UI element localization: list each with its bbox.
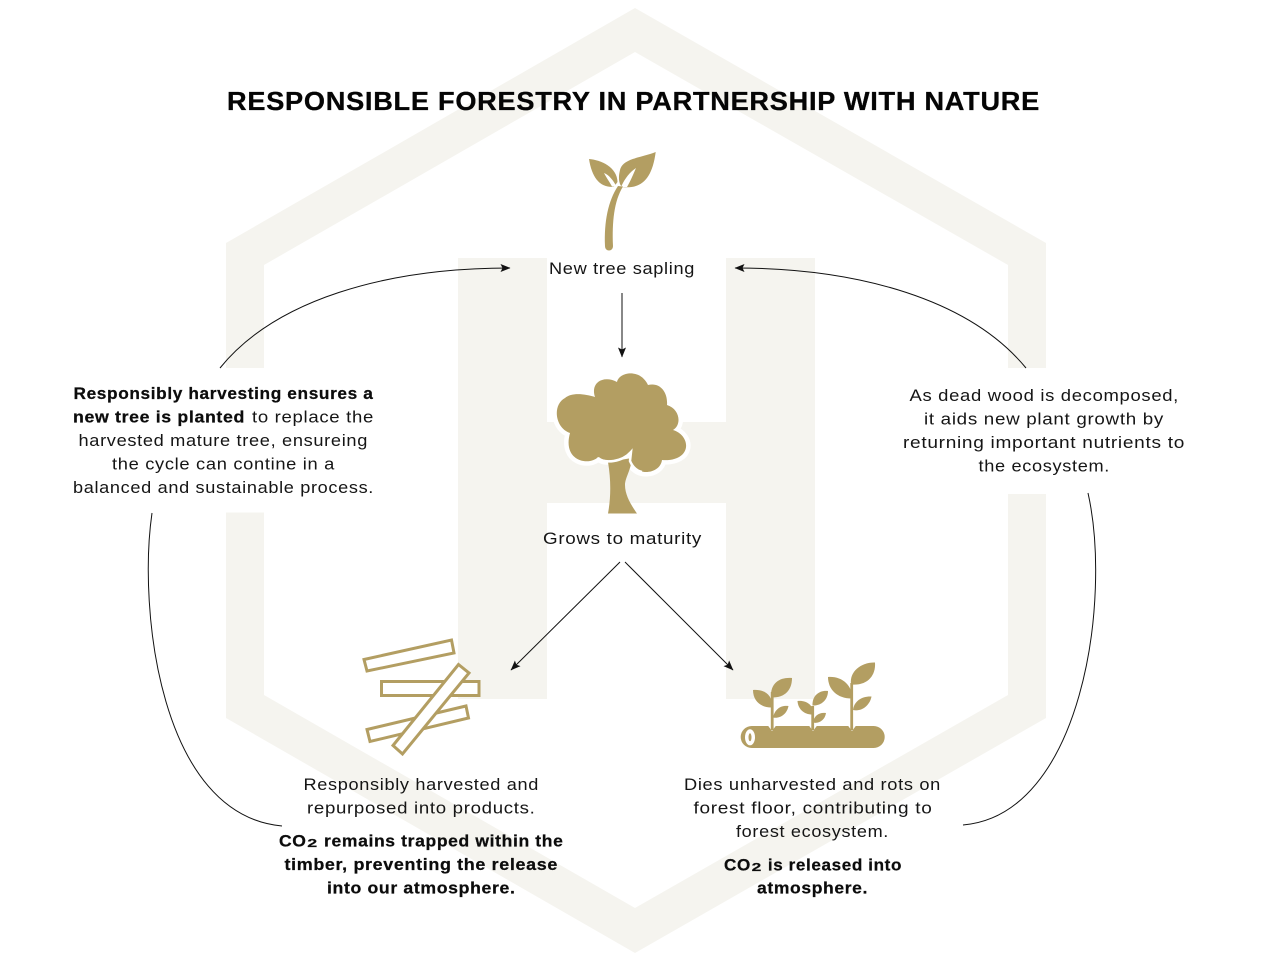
- text: harvested outcome: [279, 776, 564, 898]
- arrow: to unharvested: [625, 562, 733, 670]
- text: harvesting explanation: Responsibly harvesting ensures a: [74, 385, 374, 403]
- connector: harvested outcome to harvesting text: [148, 513, 282, 826]
- arrow: sapling to mature tree: [621, 293, 623, 357]
- text: unharvested outcome: forest ecosystem.: [736, 823, 889, 841]
- text: harvesting explanation: to replace the: [252, 409, 374, 427]
- text: unharvested outcome: Dies unharvested and rots on: [684, 776, 941, 794]
- connector: unharvested outcome to decomposition text: [963, 493, 1096, 825]
- icon: timber planks: [364, 640, 479, 754]
- arrow: harvesting text back to sapling: [220, 268, 510, 368]
- text: unharvested outcome: forest floor, contributing to: [694, 800, 932, 818]
- icon: seedlings on rotting log: [741, 662, 885, 748]
- text: harvested outcome: timber, preventing the release: [284, 856, 558, 874]
- text: harvesting explanation: balanced and sustainable process.: [73, 479, 374, 497]
- icon: mature tree: [557, 373, 686, 514]
- background: hexagon H watermark: [215, 8, 1055, 953]
- text: decomposition explanation: returning important nutrients to: [903, 434, 1185, 452]
- text: decomposition explanation: it aids new plant growth by: [924, 410, 1164, 428]
- text: unharvested outcome: atmosphere.: [757, 880, 868, 898]
- text: unharvested outcome: [684, 776, 941, 898]
- text: decomposition explanation: [903, 387, 1185, 476]
- text: decomposition explanation: the ecosystem.: [978, 458, 1110, 476]
- text: harvesting explanation: [73, 385, 374, 497]
- text: harvested outcome: CO₂ remains trapped within the: [279, 826, 564, 853]
- text: unharvested outcome: CO₂ is released into: [724, 850, 902, 876]
- arrow: decomposition text back to sapling: [735, 268, 1026, 368]
- text: harvested outcome: repurposed into products.: [307, 800, 536, 818]
- arrow: to harvested: [511, 562, 620, 670]
- text: harvesting explanation: the cycle can contine in a: [112, 456, 335, 474]
- text: harvested outcome: Responsibly harvested and: [304, 776, 539, 794]
- text: harvested outcome: into our atmosphere.: [327, 880, 516, 898]
- text: decomposition explanation: As dead wood is decomposed,: [910, 387, 1179, 405]
- text: harvesting explanation: new tree is planted: [73, 409, 245, 427]
- icon: sapling: [589, 152, 656, 250]
- label: new tree sapling: New tree sapling: [549, 260, 695, 278]
- label: grows to maturity: Grows to maturity: [543, 530, 702, 548]
- title: RESPONSIBLE FORESTRY IN PARTNERSHIP WITH NATURE: [227, 86, 1040, 116]
- text: harvesting explanation: harvested mature tree, ensureing: [78, 432, 368, 450]
